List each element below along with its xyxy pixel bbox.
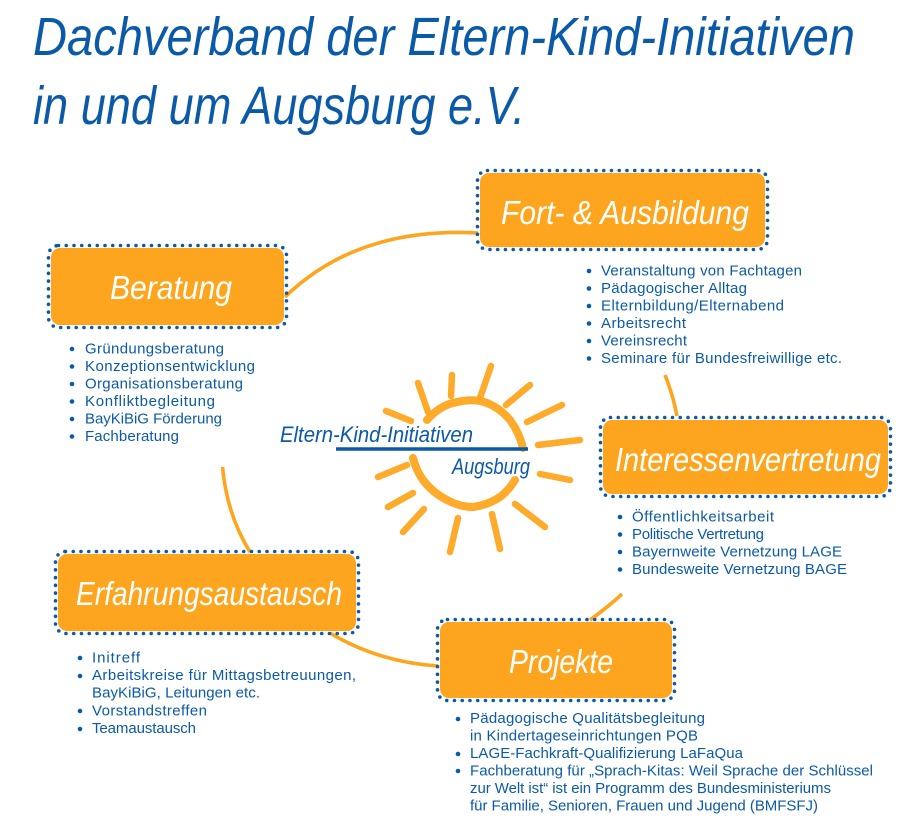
list: Initreff bbox=[92, 650, 141, 666]
list: Fachberatung bbox=[85, 428, 179, 445]
list: Fachberatung für „Sprach-Kitas: Weil Sprache der Schlüssel bbox=[470, 762, 873, 780]
panel: Projekte bbox=[438, 620, 873, 814]
logo: sun with Eltern-Kind-Initiativen Augsburg bbox=[280, 366, 580, 552]
list: Seminare für Bundesfreiwillige etc. bbox=[601, 350, 842, 367]
list: Konzeptionsentwicklung bbox=[85, 358, 255, 375]
list: Organisationsberatung bbox=[85, 376, 243, 392]
logo rule bbox=[336, 447, 528, 451]
list: Arbeitskreise für Mittagsbetreuungen, bbox=[92, 667, 356, 684]
list: Vereinsrecht bbox=[601, 332, 688, 350]
list: in Kindertageseinrichtungen PQB bbox=[470, 728, 698, 744]
list: Elternbildung/Elternabend bbox=[601, 298, 784, 314]
heading box bbox=[438, 620, 674, 700]
list: Konfliktbegleitung bbox=[85, 393, 215, 410]
connecting circle arcs bbox=[222, 232, 677, 666]
list bbox=[78, 650, 356, 737]
list: Öffentlichkeitsarbeit bbox=[632, 508, 775, 526]
logo: sun with Eltern-Kind-Initiativen Augsburg: Augsburg bbox=[450, 454, 531, 479]
list: Arbeitsrecht bbox=[601, 315, 687, 332]
heading box: Erfahrungsaustausch bbox=[76, 575, 342, 612]
list: Bundesweite Vernetzung BAGE bbox=[632, 561, 847, 578]
list: Pädagogischer Alltag bbox=[601, 280, 747, 297]
list bbox=[618, 508, 847, 578]
title bbox=[33, 7, 855, 136]
list: für Familie, Senioren, Frauen und Jugend (BMFSFJ) bbox=[470, 798, 818, 814]
heading box bbox=[478, 170, 768, 250]
list bbox=[456, 710, 873, 814]
heading box bbox=[56, 552, 358, 634]
heading box bbox=[48, 246, 286, 328]
panel: Erfahrungsaustausch bbox=[56, 552, 358, 737]
list bbox=[70, 340, 255, 445]
heading box: Interessenvertretung bbox=[615, 441, 882, 478]
title: in und um Augsburg e.V. bbox=[33, 76, 525, 136]
list: BayKiBiG, Leitungen etc. bbox=[92, 684, 260, 702]
list: Vorstandstreffen bbox=[92, 702, 207, 720]
heading box: Projekte bbox=[509, 643, 613, 680]
list: Gründungsberatung bbox=[85, 340, 224, 358]
logo text: Eltern-Kind-Initiativen bbox=[280, 422, 473, 447]
panel: Beratung bbox=[48, 246, 286, 445]
heading box: Fort- & Ausbildung bbox=[501, 194, 750, 231]
list: Teamaustausch bbox=[92, 720, 196, 737]
panel: Interessenvertretung bbox=[600, 418, 890, 578]
icon: sun bbox=[378, 366, 580, 552]
list: BayKiBiG Förderung bbox=[85, 410, 222, 428]
list: Bayernweite Vernetzung LAGE bbox=[632, 544, 842, 560]
list bbox=[587, 262, 842, 367]
heading box bbox=[600, 418, 890, 496]
list: zur Welt ist“ ist ein Programm des Bundesministeriums bbox=[470, 780, 831, 797]
list: Pädagogische Qualitätsbegleitung bbox=[470, 710, 705, 727]
panel: Fort- & Ausbildung bbox=[478, 170, 842, 367]
list: Veranstaltung von Fachtagen bbox=[601, 262, 802, 280]
heading box: Beratung bbox=[110, 269, 233, 306]
list: Politische Vertretung bbox=[632, 526, 764, 543]
list: LAGE-Fachkraft-Qualifizierung LaFaQua bbox=[470, 745, 744, 762]
